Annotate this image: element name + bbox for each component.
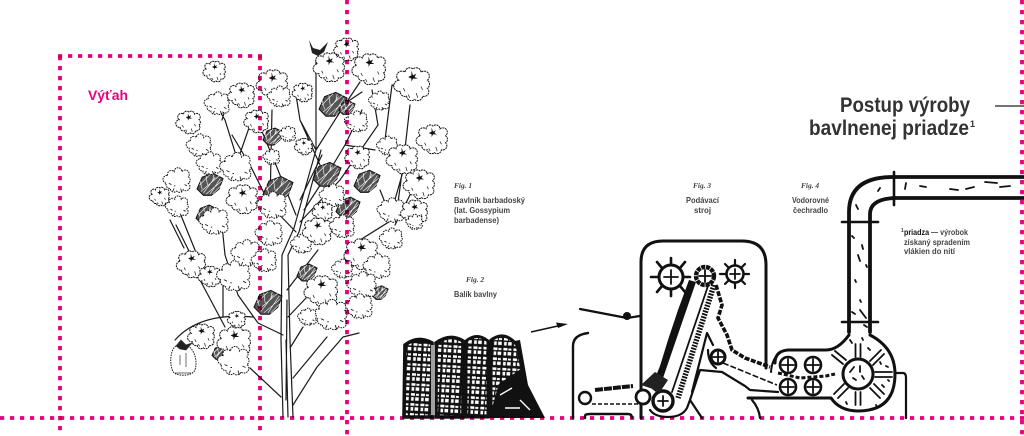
icon: cotton plant (Fig. 1): [149, 38, 447, 417]
icon: cotton bale (Fig. 2): [404, 336, 545, 418]
spiked conveyor: [651, 280, 714, 411]
plant flower bud: [309, 40, 328, 56]
feed lever: [580, 309, 640, 318]
icon: horizontal opener (Fig. 4): [748, 172, 1024, 418]
caption: Fig. 4: Vodorovné: [792, 195, 829, 205]
delivery belt: [723, 363, 777, 385]
inner roller: [711, 350, 725, 364]
hopper wall: [573, 333, 588, 418]
side label: Výťah: Výťah: [88, 87, 128, 103]
lower feed belt: [579, 372, 668, 418]
heading: 1: [970, 119, 975, 129]
footnote: vlákien do nití: [904, 246, 956, 256]
plant calyx arc: [175, 316, 253, 340]
footnote: získaný spradením: [904, 237, 970, 247]
opener casing: [748, 335, 895, 411]
footnote: [901, 227, 970, 256]
casing foot: [895, 373, 906, 418]
caption: Fig. 3: [686, 181, 720, 215]
caption: Fig. 3: stroj: [694, 205, 711, 215]
caption: Fig. 3: Podávací: [686, 195, 720, 205]
footnote: 1: [901, 228, 904, 234]
leaves: [196, 92, 388, 359]
machine housing: [641, 241, 766, 418]
heading: Postup výroby: [840, 94, 970, 117]
spiked gear right: [720, 260, 749, 288]
spiked gear left: [651, 258, 690, 296]
caption: Fig. 4: Fig. 4: [801, 181, 819, 190]
beater wheel: [832, 338, 892, 407]
plant stems: [170, 60, 420, 417]
cotton falling: [716, 285, 770, 367]
footnote: priadza — výrobok: [904, 227, 968, 237]
caption: Fig. 1: Bavlník barbadoský: [454, 195, 525, 205]
caption: Fig. 2: Fig. 2: [466, 275, 484, 284]
lower guide: [650, 333, 722, 418]
comb rollers: [778, 357, 835, 395]
icon: feeding machine (Fig. 3): [573, 241, 778, 418]
arrow: bale to feeder: [531, 322, 568, 332]
cotton bolls: [149, 38, 447, 375]
caption: Fig. 1: (lat. Gossypium: [454, 205, 510, 215]
caption: Fig. 3: Fig. 3: [693, 181, 711, 190]
caption: Fig. 1: [454, 181, 525, 225]
heading: bavlnenej priadze: [809, 117, 969, 140]
caption: Fig. 4: čechradlo: [793, 205, 828, 215]
caption: Fig. 1: Fig. 1: [454, 181, 472, 190]
caption: Fig. 4: [792, 181, 829, 215]
heading: [809, 94, 975, 140]
top roller: [696, 267, 714, 285]
caption: Fig. 2: Balík bavlny: [454, 289, 497, 299]
caption: Fig. 1: barbadense): [454, 215, 499, 225]
heading leader line: [995, 105, 1024, 107]
pipe elbow: [842, 172, 1024, 332]
caption: Fig. 2: [454, 275, 497, 299]
